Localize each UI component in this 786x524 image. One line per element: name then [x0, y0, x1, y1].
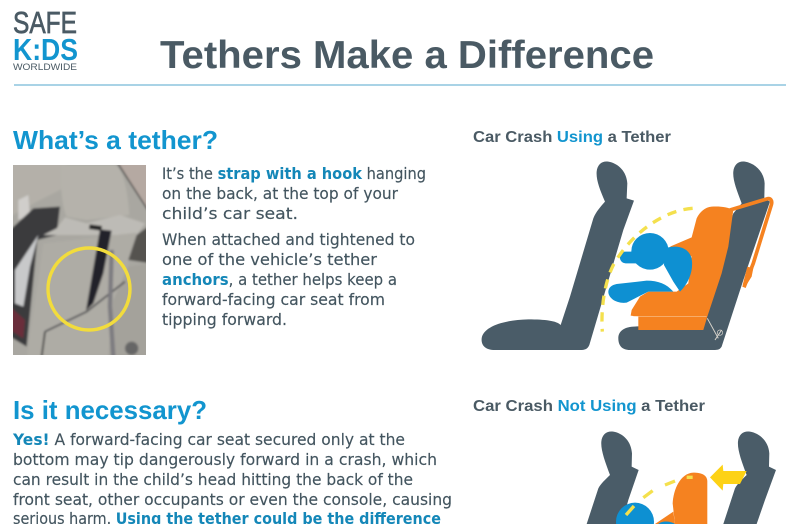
text block: tether description: one of the vehicle’s tether	[162, 251, 378, 269]
logo: Safe Kids Worldwide: SAFE	[13, 5, 77, 40]
text block: tether description: When attached and tightened to	[162, 231, 415, 249]
heading: Is it necessary?: Is it necessary?	[13, 395, 207, 425]
front seat	[587, 431, 639, 524]
text block: tether description: forward-facing car seat from	[162, 291, 385, 309]
text block: tether description	[162, 165, 426, 329]
text block: necessity explanation	[12, 431, 452, 524]
blue child dummy	[608, 233, 692, 303]
heading: What's a tether?: What’s a tether?	[13, 125, 218, 155]
rear seat	[618, 161, 770, 350]
yellow arc	[602, 208, 693, 332]
blue child head	[616, 503, 654, 524]
logo: Safe Kids Worldwide: WORLDWIDE	[13, 62, 77, 73]
orange child seat	[631, 206, 733, 330]
yellow arc	[626, 477, 693, 515]
text block: tether description: tipping forward.	[162, 311, 287, 329]
orange child seat	[673, 473, 707, 524]
text block: tether description: child’s car seat.	[162, 205, 298, 223]
text block: necessity explanation: can result in the child’s head hitting the back of the	[13, 471, 413, 489]
yellow circle highlight on photo	[48, 248, 130, 330]
logo: Safe Kids Worldwide: K:DS	[13, 32, 78, 67]
logo: Safe Kids Worldwide	[13, 5, 78, 73]
rear seat	[723, 431, 776, 524]
text block: necessity explanation: Yes! A forward-facing car seat secured only at the	[12, 431, 405, 449]
text block: tether description: anchors, a tether helps keep a	[162, 271, 397, 289]
caption: not using a tether: Car Crash Not Using a Tether	[473, 398, 705, 415]
text block: necessity explanation: front seat, other occupants or even the console, causing	[13, 491, 452, 509]
illustration: crash not using a tether	[587, 431, 776, 524]
yellow arrow	[710, 465, 747, 491]
illustration: crash using a tether	[482, 161, 772, 350]
photo: tether on the back of a car seat	[10, 162, 150, 358]
title: Tethers Make a Difference	[160, 34, 654, 77]
orange tether strap	[730, 199, 772, 287]
anchor	[707, 318, 722, 340]
text block: tether description: It’s the strap with a hook hanging	[162, 165, 426, 183]
text block: necessity explanation: bottom may tip dangerously forward in a crash, which	[13, 451, 437, 469]
front seat	[482, 161, 634, 350]
text block: tether description: on the back, at the top of your	[162, 185, 399, 203]
caption: using a tether: Car Crash Using a Tether	[473, 129, 671, 146]
